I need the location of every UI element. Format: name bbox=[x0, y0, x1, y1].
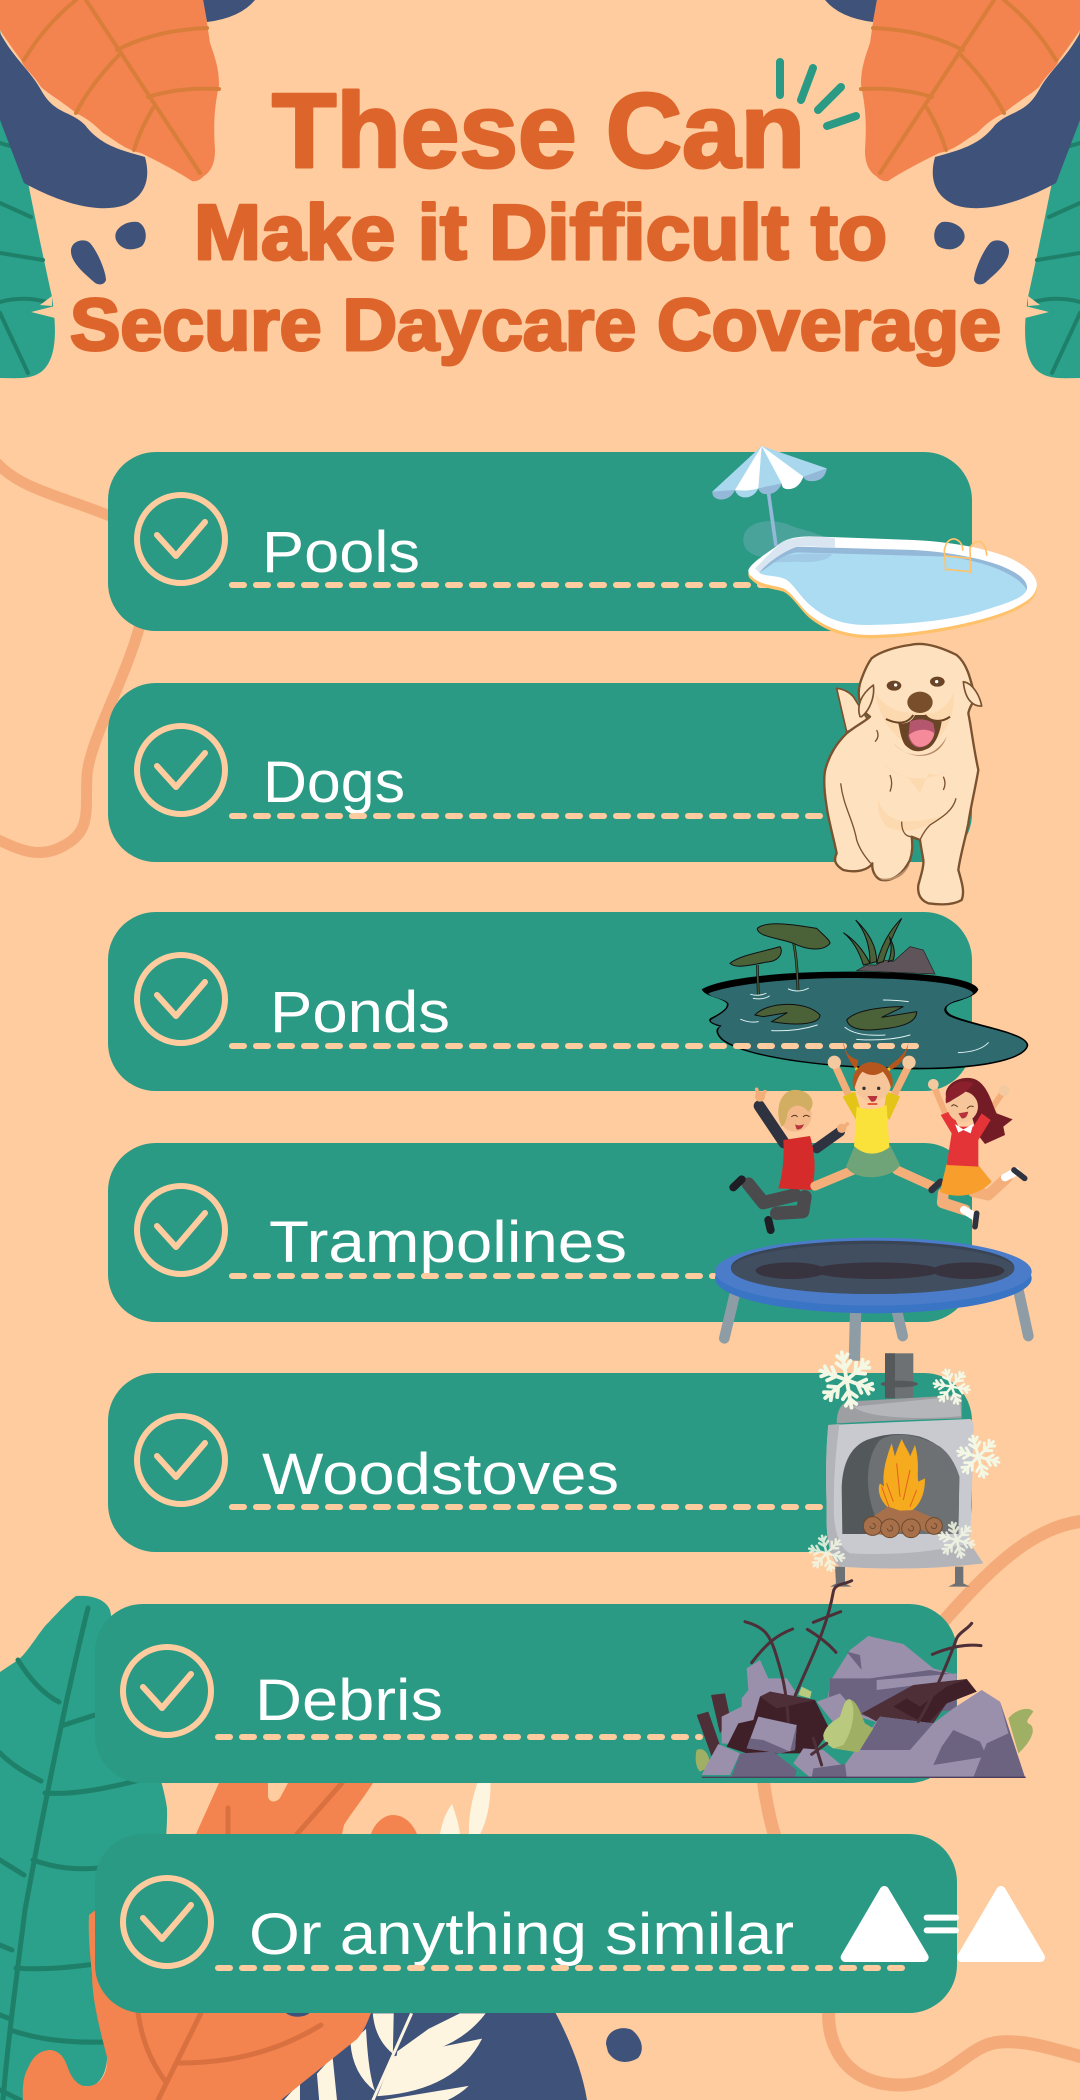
title bbox=[70, 62, 1001, 366]
orange leaf bottom left bbox=[23, 1783, 417, 2100]
panel: or anything similar bbox=[95, 1834, 1040, 2013]
illustration: debris pile bbox=[696, 1581, 1033, 1777]
label: Pools bbox=[262, 520, 420, 585]
decoration: right curve bbox=[762, 1521, 1080, 2085]
check icon bbox=[137, 1416, 225, 1504]
decoration: bottom left foliage bbox=[0, 1596, 642, 2100]
icon: triangle equals triangle bbox=[845, 1891, 1040, 1957]
check icon bbox=[123, 1878, 211, 1966]
illustration: trampoline bbox=[715, 1238, 1032, 1361]
navy drops top left bbox=[71, 222, 146, 284]
panel: pools bbox=[108, 446, 1037, 638]
navy drops top right bbox=[934, 222, 1009, 284]
panel: trampolines bbox=[108, 1039, 1032, 1361]
navy blob top left bbox=[0, 0, 255, 208]
check icon bbox=[137, 955, 225, 1043]
panel: woodstoves bbox=[108, 1344, 1004, 1587]
check icon bbox=[137, 1186, 225, 1274]
check icon bbox=[123, 1647, 211, 1735]
title line: Secure Daycare Coverage: Secure Daycare Coverage bbox=[70, 285, 1001, 366]
bar bbox=[95, 1834, 957, 2013]
decoration: top right foliage bbox=[825, 0, 1080, 378]
bar bbox=[108, 683, 972, 862]
illustration: swimming pool with umbrella bbox=[712, 446, 1037, 638]
label: Ponds bbox=[270, 980, 450, 1045]
label: Dogs bbox=[263, 750, 405, 815]
illustration: woodstove bbox=[804, 1344, 1004, 1587]
navy dot bottom bbox=[606, 2028, 642, 2062]
panel: dogs bbox=[108, 644, 982, 904]
green leaf top left bbox=[0, 30, 55, 378]
check icon bbox=[137, 726, 225, 814]
illustration: pond with lily pads bbox=[702, 918, 1028, 1069]
green leaf bottom left bbox=[0, 1596, 167, 2100]
illustration: kids jumping bbox=[733, 1039, 1025, 1230]
decoration: left curve upper bbox=[0, 460, 140, 853]
navy blob bottom bbox=[281, 2010, 587, 2100]
bar bbox=[95, 1604, 957, 1783]
illustration: puppy bbox=[824, 644, 982, 904]
label: Or anything similar bbox=[249, 1902, 794, 1967]
title line: Make it Difficult to: Make it Difficult to bbox=[194, 188, 887, 276]
boy bbox=[733, 1089, 847, 1230]
snowflakes bbox=[804, 1344, 1004, 1575]
orange leaf top left bbox=[0, 0, 219, 181]
fern leaf bbox=[283, 2013, 486, 2100]
check icon bbox=[137, 495, 225, 583]
orange leaf top right bbox=[861, 0, 1080, 181]
title line: These Can: These Can bbox=[272, 72, 805, 190]
bar bbox=[108, 1143, 972, 1322]
bar bbox=[108, 912, 972, 1091]
decoration: top left foliage bbox=[0, 0, 255, 378]
middle girl bbox=[815, 1039, 941, 1190]
cream leaves bbox=[440, 1775, 491, 1834]
bar bbox=[108, 1373, 972, 1552]
bar bbox=[108, 452, 972, 631]
icon: sparks beside title bbox=[780, 62, 856, 126]
label: Trampolines bbox=[269, 1210, 627, 1275]
green leaf top right bbox=[1025, 30, 1080, 378]
navy blob top right bbox=[825, 0, 1080, 208]
label: Debris bbox=[255, 1668, 443, 1733]
right girl bbox=[928, 1078, 1025, 1227]
label: Woodstoves bbox=[262, 1442, 619, 1507]
panel: ponds bbox=[108, 912, 1028, 1091]
panel: debris bbox=[95, 1581, 1033, 1783]
